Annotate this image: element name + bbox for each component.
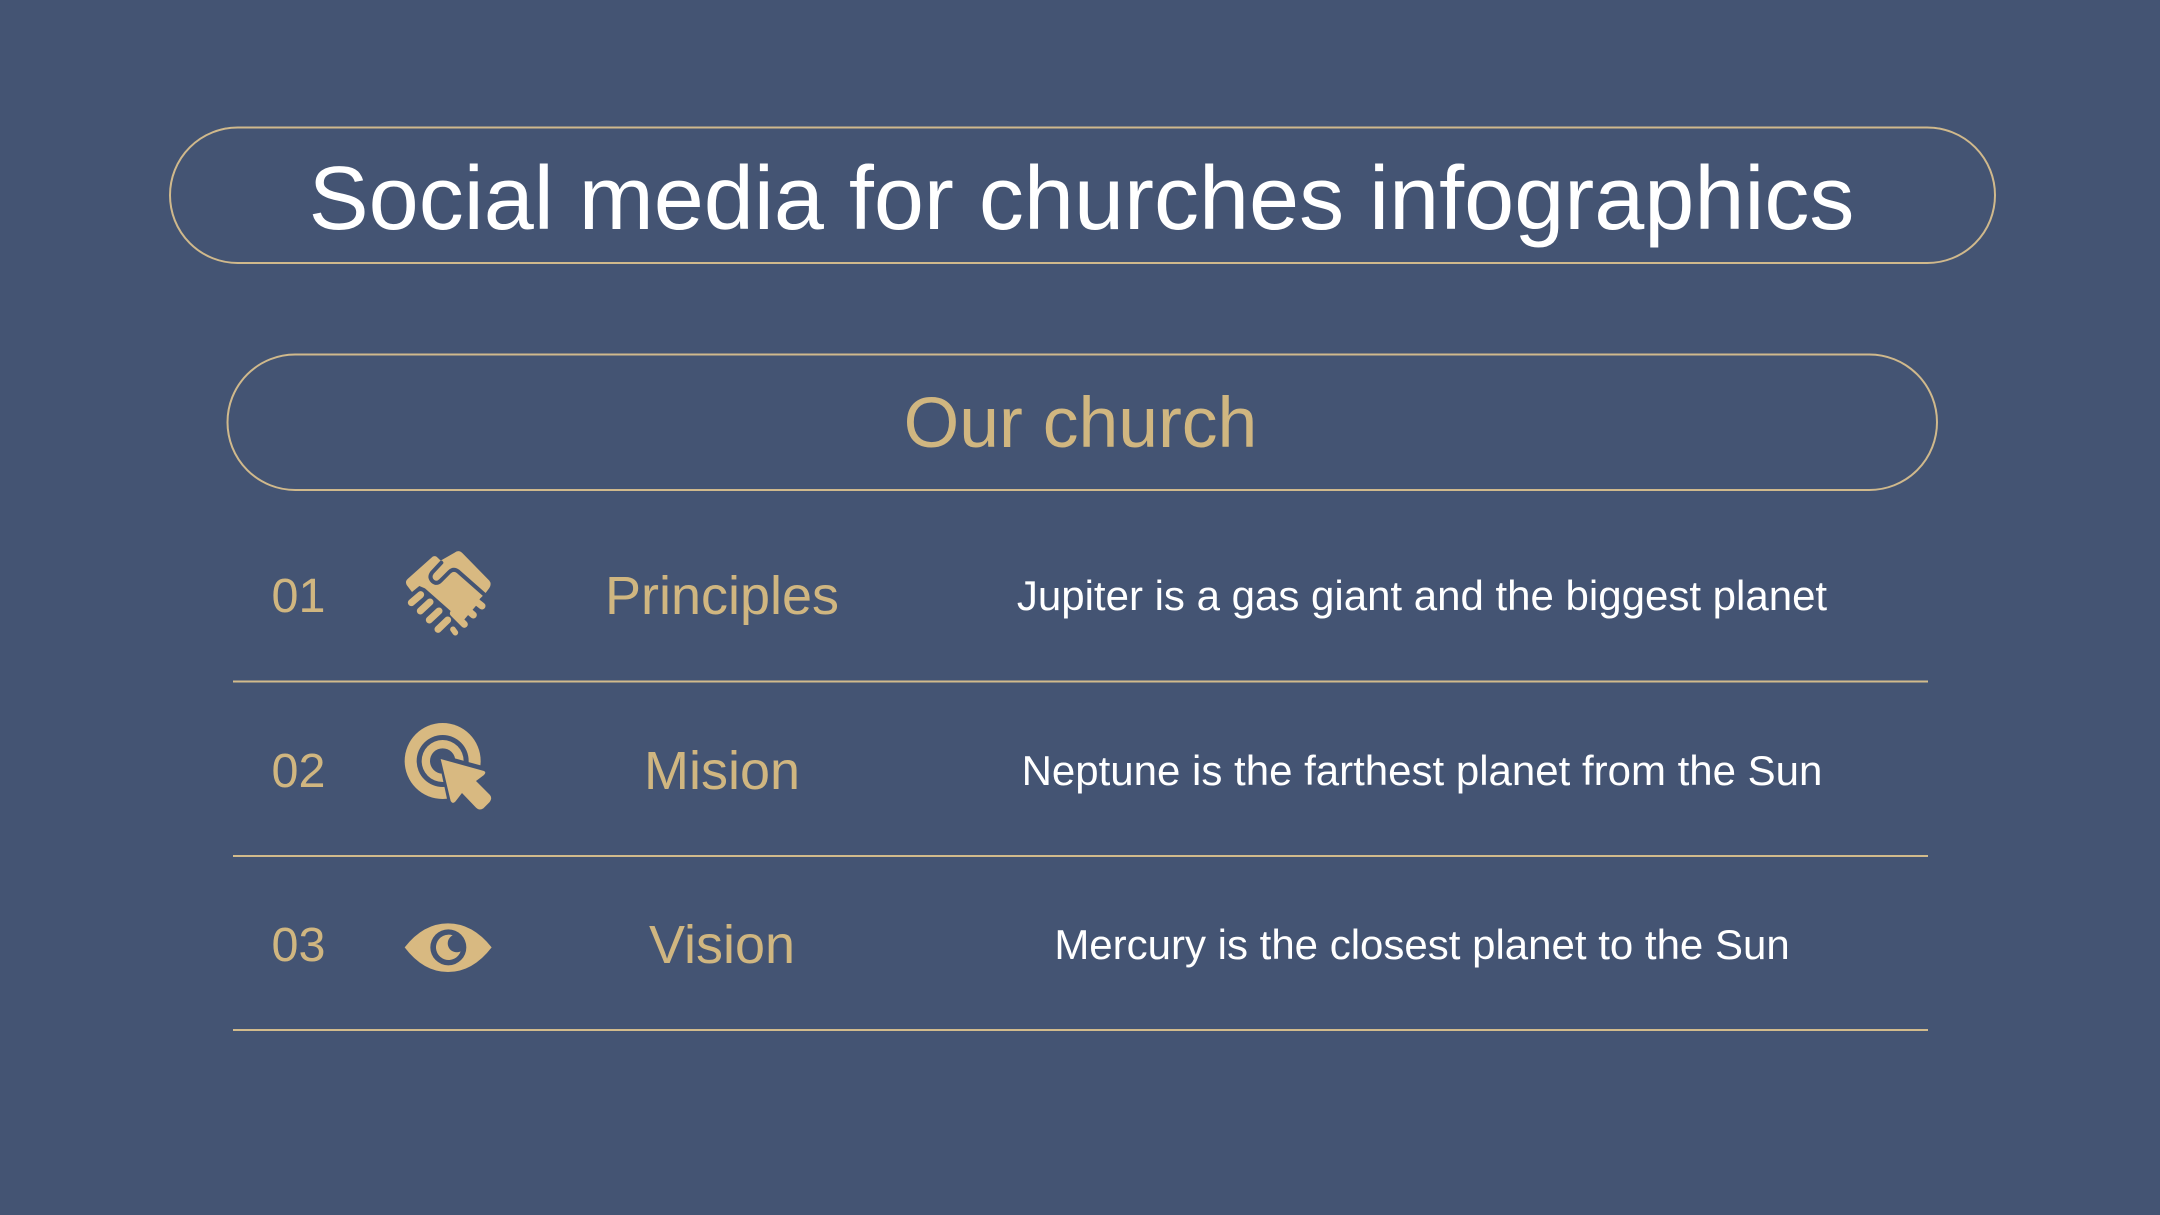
subtitle pill [228,354,1937,490]
divider 1 [233,680,1928,682]
label: Mision [644,741,800,801]
row 1: principles [272,551,1827,633]
icon: eye [405,923,492,972]
divider 3 [233,1029,1928,1031]
label: Principles [605,566,839,626]
title: Social media for churches infographics [309,149,1854,249]
description: Neptune is the farthest planet from the Sun [1022,747,1822,794]
row 3: vision [272,915,1790,975]
number 02: 02 [272,744,325,798]
row 2: mision [272,723,1822,818]
number 03: 03 [272,918,325,972]
handshake seam [430,563,486,596]
icon: handshake [406,551,491,633]
number 01: 01 [272,569,325,623]
subtitle: Our church [904,383,1257,463]
label: Vision [649,915,795,975]
icon: target cursor [405,723,495,818]
divider 2 [233,855,1928,857]
description: Jupiter is a gas giant and the biggest planet [1017,572,1827,619]
title pill [170,128,1995,263]
description: Mercury is the closest planet to the Sun [1054,921,1790,968]
